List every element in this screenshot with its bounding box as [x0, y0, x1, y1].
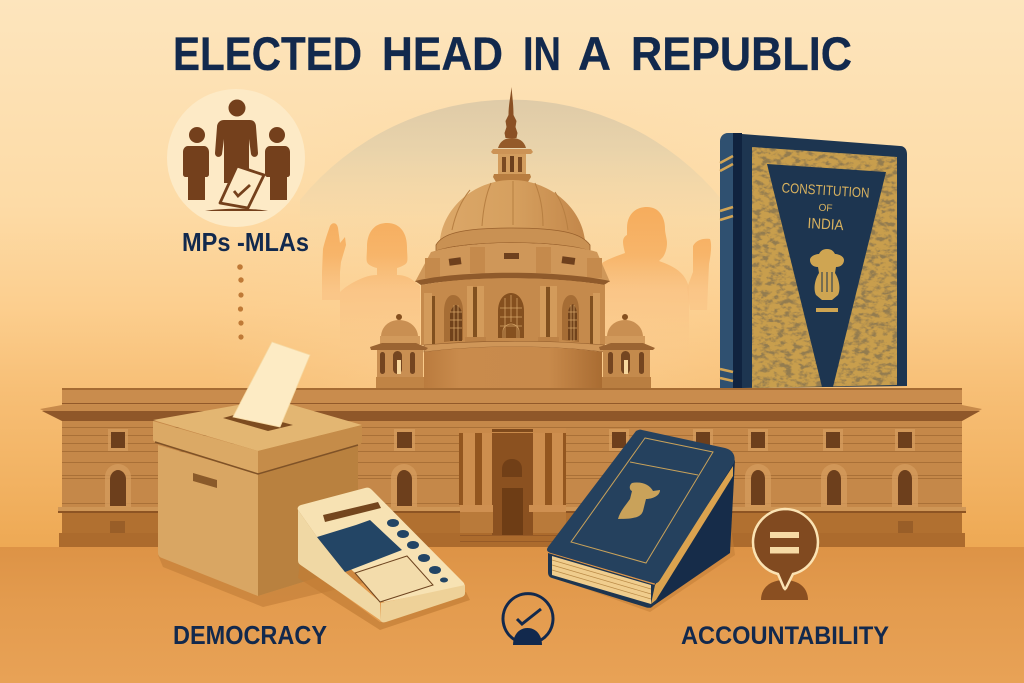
ballot paper	[233, 342, 310, 427]
dome shell	[440, 180, 585, 240]
dotted connector	[237, 264, 244, 340]
attic level	[415, 243, 610, 282]
equality speech icon	[753, 509, 818, 600]
side slot	[193, 473, 217, 488]
label: MPs -MLAs: MPs -MLAs	[182, 227, 309, 257]
pages	[552, 556, 651, 604]
top surface	[298, 488, 464, 602]
cornice	[415, 273, 610, 285]
column level ledge	[424, 341, 604, 352]
book title line 1: CONSTITUTION	[781, 179, 870, 201]
equals bars	[770, 532, 799, 554]
background glow	[200, 100, 830, 550]
silhouettes of citizens	[322, 207, 711, 396]
national emblem	[810, 249, 844, 312]
parapet	[62, 388, 962, 406]
dark pennant shape	[767, 164, 886, 387]
silhouette: raised hand	[322, 223, 346, 300]
plinth base	[59, 533, 965, 547]
book title text	[779, 179, 870, 236]
square windows	[111, 432, 912, 448]
shadow	[298, 563, 470, 630]
columns with dark gaps	[424, 286, 600, 345]
basement vents	[110, 521, 913, 533]
lid right skirt	[258, 425, 362, 474]
display strip	[323, 502, 381, 522]
lantern	[491, 138, 533, 182]
attic pilasters	[425, 247, 602, 278]
ground	[0, 547, 1024, 683]
title: REPUBLIC	[631, 27, 852, 80]
right face	[258, 445, 358, 596]
right cupola	[599, 314, 655, 388]
centre figure	[215, 100, 258, 183]
title	[173, 27, 852, 80]
ballot slip with tick	[220, 166, 264, 208]
lid left skirt	[153, 421, 258, 474]
person base	[761, 580, 808, 600]
ground line	[205, 209, 268, 211]
dome ribs	[452, 181, 568, 230]
title: A	[578, 27, 611, 80]
front lip	[380, 585, 465, 622]
silhouette: right person	[601, 207, 689, 387]
drum band	[436, 228, 590, 251]
silhouette: left person	[340, 223, 420, 396]
gold patterned panel	[752, 147, 897, 388]
title: ELECTED	[173, 27, 362, 80]
dark back wedge	[650, 460, 735, 608]
label: DEMOCRACY: DEMOCRACY	[173, 620, 327, 650]
cover emblem	[618, 482, 660, 519]
left face	[158, 445, 258, 596]
box shadow	[158, 555, 388, 607]
icon background disc	[167, 89, 305, 227]
book title line 2: OF	[818, 203, 833, 214]
constitution book: upright	[720, 133, 907, 388]
lower wall	[62, 512, 962, 533]
ballot box	[153, 342, 388, 607]
silhouette: far right hand	[687, 239, 711, 310]
left cupola	[370, 314, 428, 388]
left figure	[183, 127, 209, 200]
column level	[421, 278, 605, 345]
gold page edge	[651, 466, 733, 604]
left side	[298, 510, 380, 620]
window frames	[105, 429, 918, 507]
keypad panel	[355, 556, 433, 602]
ballot slot	[223, 412, 293, 431]
arched windows	[110, 470, 912, 506]
tick mark	[517, 609, 541, 624]
lower drum	[424, 347, 602, 388]
book title line 3: INDIA	[807, 215, 844, 234]
right figure	[265, 127, 290, 200]
spine	[720, 133, 736, 388]
law book: lying tilted	[547, 430, 735, 612]
shadow	[555, 520, 735, 612]
arched windows	[444, 293, 579, 342]
title: IN	[523, 27, 561, 80]
dome base	[513, 628, 542, 645]
cover	[742, 134, 907, 388]
ring	[503, 594, 553, 640]
string course	[58, 507, 966, 511]
top cover	[547, 430, 735, 583]
check icon	[503, 594, 553, 645]
background arc halo	[300, 100, 722, 400]
buttons	[387, 519, 448, 582]
bottom cover	[548, 553, 658, 608]
attic windows	[449, 253, 575, 266]
voters icon: MPs and MLAs	[167, 89, 305, 227]
speech bubble	[753, 509, 818, 589]
wall courses	[62, 427, 962, 504]
wall	[62, 418, 962, 508]
voting machine EVM	[298, 488, 470, 630]
title: HEAD	[382, 27, 503, 80]
lid top	[153, 399, 362, 451]
central portico	[459, 428, 566, 542]
cover gold border	[571, 438, 713, 563]
label: ACCOUNTABILITY: ACCOUNTABILITY	[681, 622, 889, 650]
spire	[504, 87, 518, 138]
spine bands	[720, 156, 733, 381]
cornice	[40, 405, 982, 421]
main building facade	[40, 388, 982, 547]
central dome	[370, 87, 655, 388]
screen	[317, 520, 402, 572]
